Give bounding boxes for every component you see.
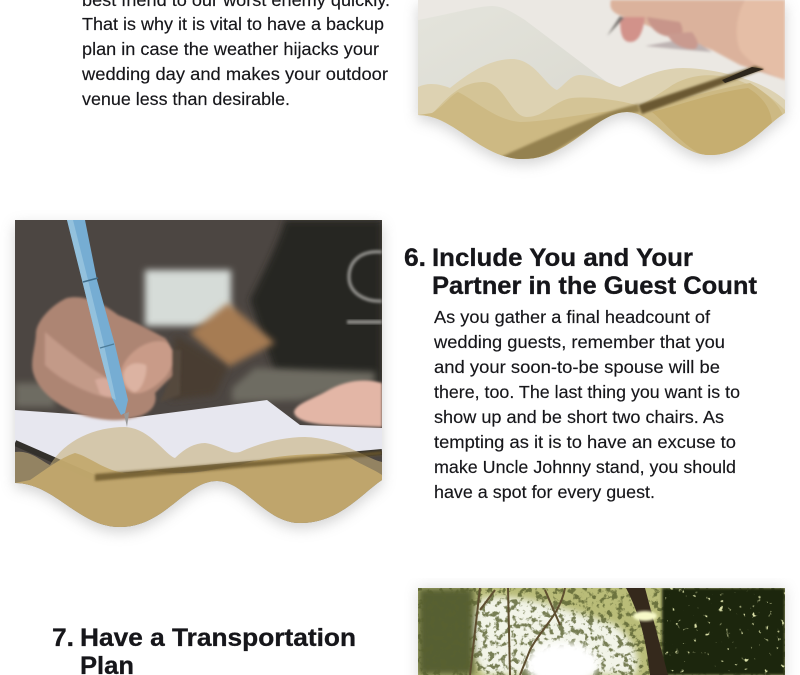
notebook spine (638, 66, 764, 114)
heading: section 6: Include You and Your (432, 244, 693, 272)
text block: section 6 body: there, too. The last thing you want is to (434, 382, 740, 402)
blue pen (67, 220, 129, 427)
branches (470, 588, 565, 675)
text block: section 6 body: tempting as it is to have an excuse to (434, 432, 736, 452)
sheet of paper (15, 400, 382, 477)
text block: section 6 body (433, 307, 740, 502)
dark shirt (250, 220, 382, 385)
photo: forest canopy seen from below (418, 588, 785, 675)
text block: section 5 body (continued) (81, 0, 390, 109)
hand holding pen (607, 0, 785, 80)
resting hand (294, 380, 382, 427)
blurred table (15, 368, 375, 407)
text block: section 6 body: have a spot for every guest. (434, 482, 655, 502)
text block: section 5 body (continued): venue less than desirable. (82, 89, 290, 109)
clipboard and gold wave layers (15, 443, 382, 478)
text block: section 5 body (continued): plan in case the weather hijacks your (82, 39, 379, 59)
leaf texture (418, 588, 785, 675)
writing hand (32, 297, 181, 420)
blurred paper in background (145, 270, 231, 326)
shirt logo (349, 252, 382, 301)
heading: section 7: Have a Transportation (80, 624, 356, 652)
heading: section 7 (52, 624, 356, 675)
heading: section 6: 6. (404, 244, 426, 272)
photo: open notebook with hand and gold wave edge (418, 0, 785, 165)
text block: section 5 body (continued): wedding day and makes your outdoor (81, 64, 388, 84)
photo: hand writing with blue pen and gold wave edge (15, 220, 382, 540)
right dark foliage (662, 588, 785, 675)
light speckles in right foliage (665, 588, 785, 675)
text block: section 6 body: show up and be short two chairs. As (434, 407, 724, 427)
sun glare (633, 611, 657, 621)
left dark trees (418, 588, 474, 675)
gold wave layers (418, 59, 785, 117)
text block: section 6 body: As you gather a final headcount of (434, 307, 710, 327)
blurred forearm (190, 303, 275, 367)
text block: section 6 body: make Uncle Johnny stand, you should (434, 457, 736, 477)
text block: section 5 body (continued): That is why it is vital to have a backup (82, 14, 384, 34)
heading: section 6: Partner in the Guest Count (432, 272, 758, 300)
heading: section 6 (404, 244, 758, 300)
bright sky (470, 597, 638, 675)
heading: section 7: 7. (52, 624, 74, 652)
text block: section 6 body: and your soon-to-be spouse will be (434, 357, 720, 377)
text block: section 6 body: wedding guests, remember that you (433, 332, 725, 352)
tree trunk (626, 588, 668, 675)
left notebook page (418, 6, 606, 90)
